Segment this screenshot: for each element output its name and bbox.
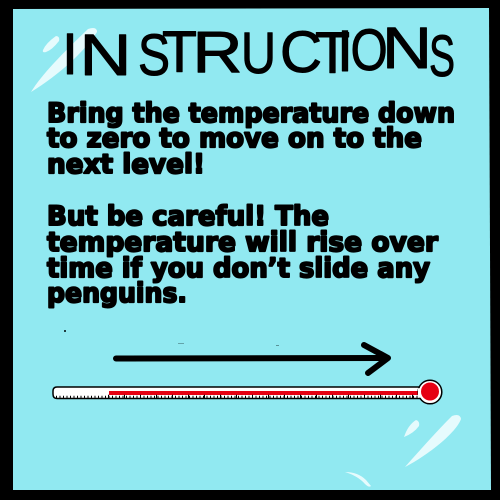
text block: second paragraph: But be careful! The bbox=[47, 201, 329, 232]
thermometer bbox=[53, 380, 442, 404]
text block: second paragraph: time if you don’t slide any bbox=[47, 253, 430, 284]
title: I bbox=[62, 22, 78, 87]
title: T bbox=[315, 21, 350, 86]
thermometer tube bbox=[53, 387, 422, 398]
text block: first paragraph bbox=[47, 98, 455, 180]
text block: second paragraph: temperature will rise over bbox=[47, 227, 439, 258]
text block: second paragraph bbox=[47, 201, 439, 309]
text block: first paragraph: next level! bbox=[47, 149, 205, 180]
title: N bbox=[382, 16, 432, 81]
title: U bbox=[241, 21, 276, 86]
title: O bbox=[351, 18, 388, 83]
thermometer scale ticks bbox=[56, 395, 422, 398]
title: R bbox=[192, 20, 242, 85]
thermometer red level bbox=[109, 391, 424, 395]
text block: second paragraph: penguins. bbox=[47, 278, 187, 309]
text block: first paragraph: to zero to move on to the bbox=[47, 123, 422, 154]
title: N bbox=[80, 23, 132, 88]
title: T bbox=[162, 20, 197, 85]
thermometer bulb bbox=[418, 380, 442, 404]
icon: ice glint bottom right bbox=[345, 415, 461, 487]
title: S bbox=[138, 23, 170, 88]
arrow bbox=[116, 345, 388, 373]
icon: ice glint top left bbox=[31, 28, 97, 92]
specks bbox=[64, 330, 279, 346]
text block: first paragraph: Bring the temperature down bbox=[47, 98, 455, 129]
title: I bbox=[337, 19, 353, 84]
title: S bbox=[429, 24, 455, 89]
title: C bbox=[280, 20, 322, 85]
